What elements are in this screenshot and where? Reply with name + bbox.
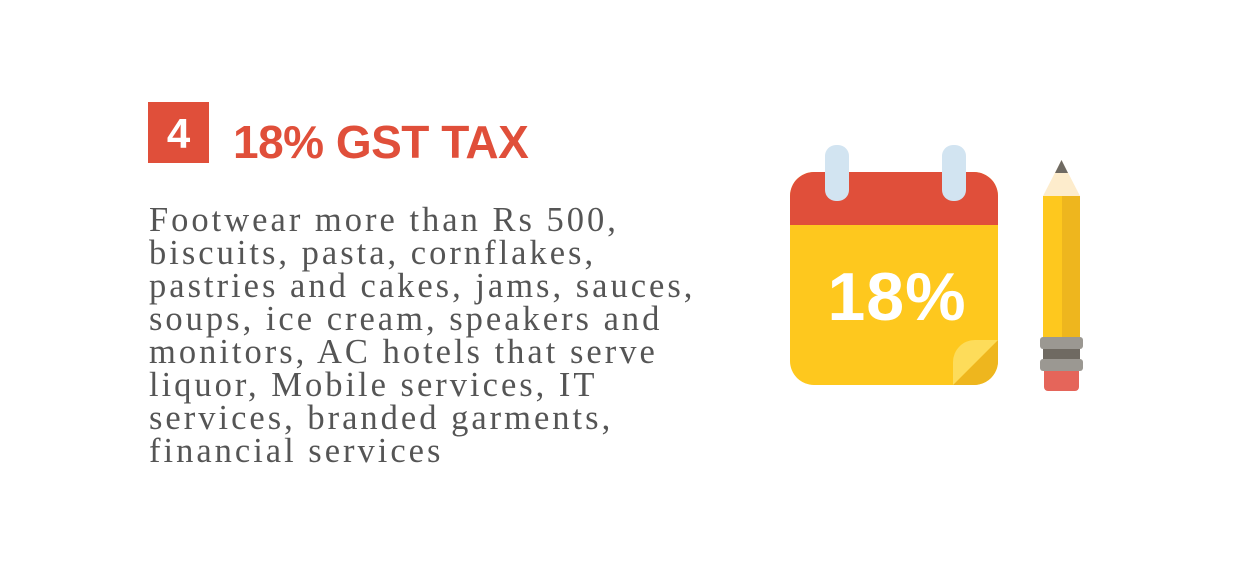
body text: financial services <box>149 432 443 470</box>
icon: pencil <box>1040 160 1083 391</box>
icon: calendar: 18% <box>827 259 967 335</box>
body text: biscuits, pasta, cornflakes, <box>149 234 596 272</box>
body text <box>149 201 695 470</box>
body text: monitors, AC hotels that serve <box>149 333 658 371</box>
title: 18% GST TAX <box>233 116 528 168</box>
body text: liquor, Mobile services, IT <box>149 366 598 404</box>
number badge <box>148 102 209 163</box>
number badge: 4 <box>167 110 190 157</box>
icon: calendar <box>790 145 998 385</box>
body text: soups, ice cream, speakers and <box>149 300 662 338</box>
body text: services, branded garments, <box>149 399 613 437</box>
body text: pastries and cakes, jams, sauces, <box>149 267 695 305</box>
body text: Footwear more than Rs 500, <box>149 201 619 239</box>
